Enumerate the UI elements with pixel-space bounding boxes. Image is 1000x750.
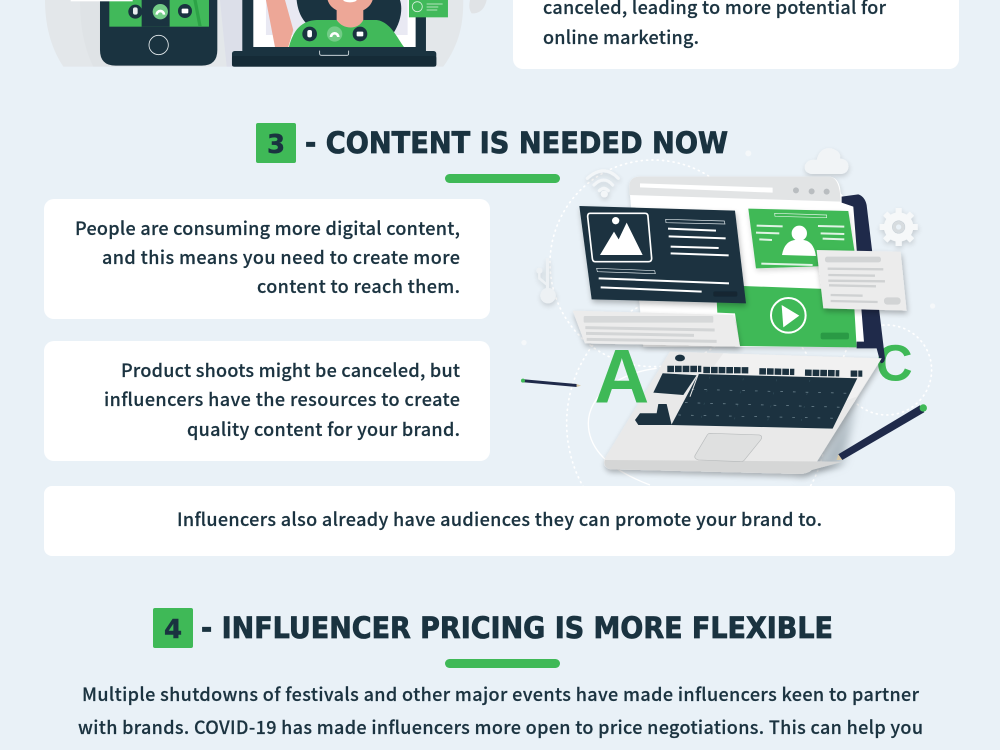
underline bar: section 3 xyxy=(445,174,560,183)
panel: digital content card: content to reach them. xyxy=(257,273,460,299)
heading: section 3: 3 xyxy=(267,130,285,160)
panel: product shoots card xyxy=(44,341,490,461)
icon: wifi xyxy=(587,171,618,196)
laptop shadow xyxy=(793,397,857,478)
panel: product shoots card: quality content for your brand. xyxy=(187,416,460,442)
icon: letter C: C xyxy=(876,335,913,392)
panel: green profile card xyxy=(748,209,857,268)
heading: section 4: 4 xyxy=(164,615,182,645)
panel: audiences card: Influencers also already have audiences they can promote your brand to. xyxy=(177,506,822,532)
panel: product shoots card: Product shoots might be canceled, but xyxy=(121,357,460,383)
panel: digital content card: People are consuming more digital content, xyxy=(75,215,460,241)
panel: product shoots card: influencers have the resources to create xyxy=(104,386,460,412)
panel: top text card xyxy=(513,0,959,69)
panel: gray note card xyxy=(817,250,907,311)
panel: dark image card xyxy=(579,206,746,303)
panel: gray lower text card xyxy=(573,311,740,347)
decorative dotted orbits xyxy=(550,160,757,367)
icon: left pencil xyxy=(521,379,581,387)
panel: digital content card xyxy=(44,199,490,319)
icon: gear xyxy=(880,208,918,246)
panel: audiences card xyxy=(44,486,955,556)
icon: smartphone xyxy=(100,0,217,66)
icon: right pencil xyxy=(837,404,927,460)
text: online marketing potential xyxy=(543,0,887,50)
panel: digital content card: and this means you need to create more xyxy=(102,244,460,270)
browser window xyxy=(629,177,877,347)
icon: letter A: A xyxy=(594,334,649,419)
laptop base xyxy=(604,352,882,474)
keyboard xyxy=(635,355,857,429)
text: influencer pricing paragraph: Multiple shutdowns of festivals and other major events have made influencers keen to partner xyxy=(82,681,920,707)
text: online marketing potential: online marketing. xyxy=(543,24,699,50)
illustration: laptop with floating content cards xyxy=(521,148,935,553)
trackpad xyxy=(695,433,762,462)
icon: usb xyxy=(536,258,556,303)
text: influencer pricing paragraph xyxy=(78,681,923,740)
heading: section 3: - CONTENT IS NEEDED NOW xyxy=(305,126,728,160)
heading: section 4: - INFLUENCER PRICING IS MORE FLEXIBLE xyxy=(201,611,833,645)
laptop screen frame xyxy=(842,194,885,363)
icon: cloud xyxy=(805,148,849,174)
underline bar: section 4 xyxy=(445,659,560,668)
text: influencer pricing paragraph: with brands. COVID-19 has made influencers more open to price negotiations. This can help you xyxy=(78,714,923,740)
icon: laptop with woman on video call xyxy=(232,0,448,67)
panel: video player xyxy=(716,285,857,347)
illustration: video call on phone and laptop xyxy=(45,0,487,67)
